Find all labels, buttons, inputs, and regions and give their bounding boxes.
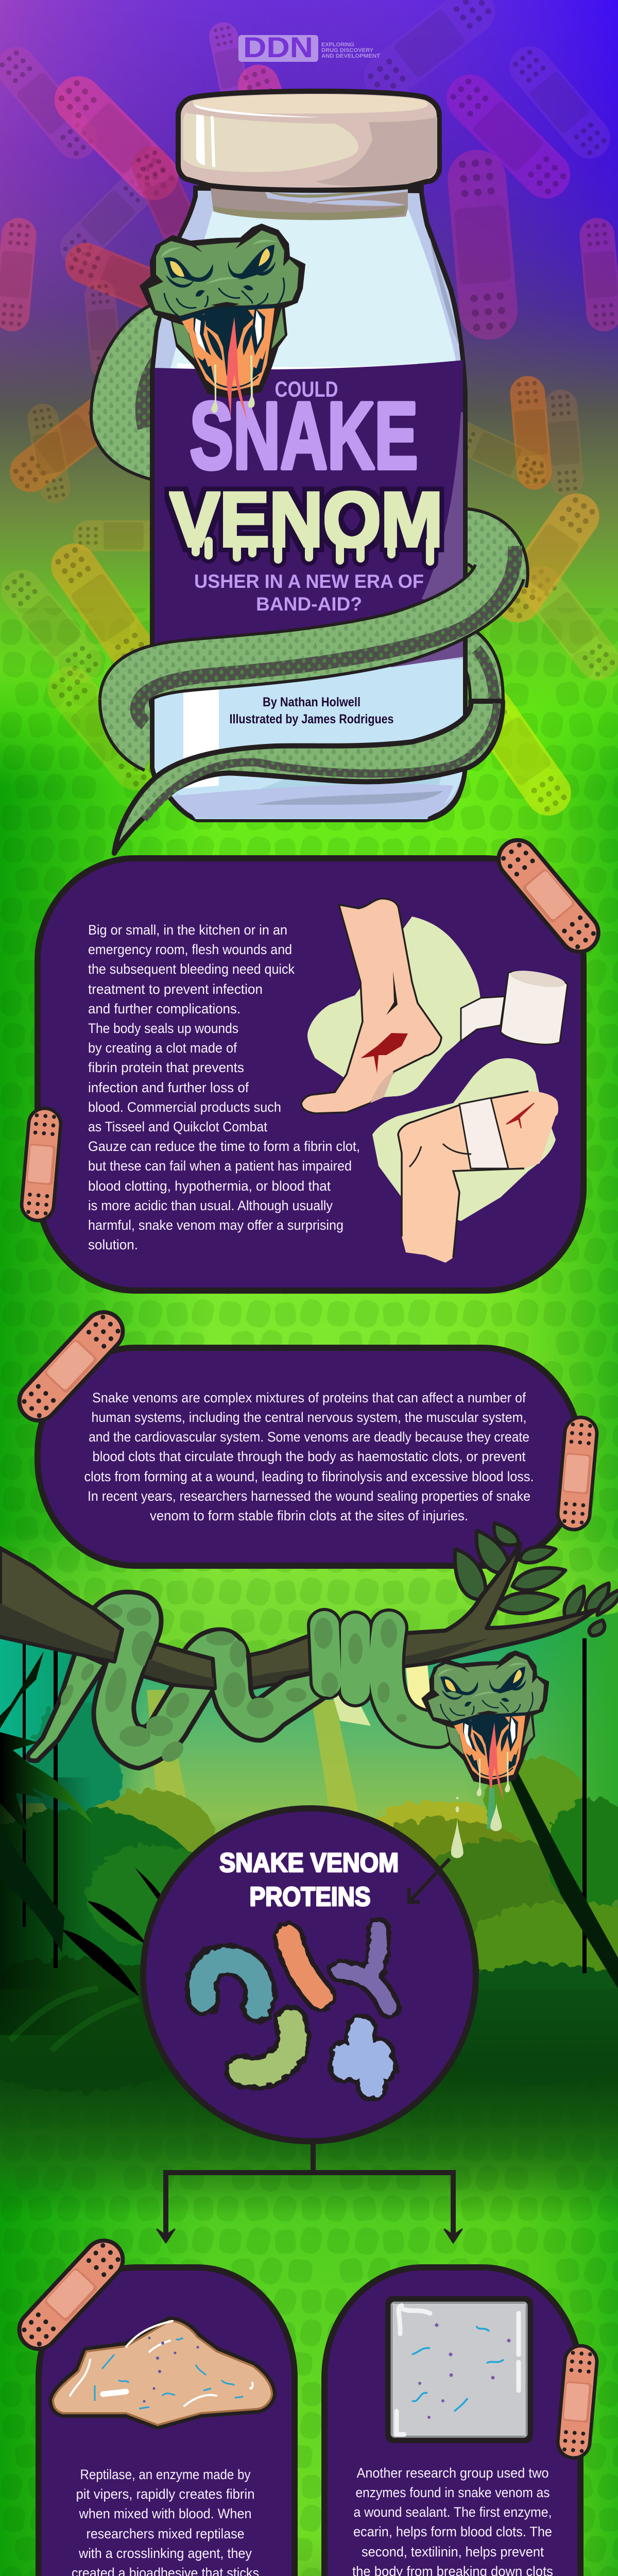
- text: reptilase paragraph: [67, 2467, 263, 2576]
- byline: Illustrated by James Rodrigues: [230, 712, 393, 726]
- icon: bandage right of venom panel: [557, 1416, 598, 1531]
- arrow: proteins to research branches: [157, 2144, 462, 2243]
- text: ecarin paragraph: ecarin, helps form blood clots. The: [353, 2524, 552, 2539]
- venom drops: [451, 1788, 502, 1858]
- snake hanging from branch: [28, 1592, 438, 1768]
- logo: DDN: EXPLORING: [321, 42, 354, 48]
- text: intro paragraph: [88, 922, 360, 1252]
- text: intro paragraph: infection and further loss of: [88, 1080, 249, 1095]
- text: reptilase paragraph: with a crosslinking agent, they: [78, 2546, 252, 2561]
- text: ecarin paragraph: Another research group used two: [356, 2465, 549, 2481]
- panel: ecarin and textilinin: [324, 2267, 580, 2576]
- label subheading: BAND-AID?: [256, 594, 362, 615]
- snake main coil: [94, 1592, 330, 1768]
- logo: DDN: DDN: [243, 31, 313, 63]
- icon: bandage top left of reptilase panel: [11, 2233, 131, 2357]
- text: intro paragraph: is more acidic than usual. Although usually: [88, 1198, 333, 1213]
- bottle cap: [178, 91, 439, 190]
- text: intro paragraph: harmful, snake venom may offer a surprising: [88, 1217, 344, 1233]
- tree branch right side with leaves: [249, 1523, 618, 1688]
- tree branch left side: [0, 1548, 215, 1688]
- snake coils in front of bottle: [114, 546, 515, 853]
- heading: snake venom proteins: PROTEINS: [249, 1882, 371, 1912]
- illustration: hydrogel square: [389, 2300, 529, 2439]
- snake hanging loops: [324, 1625, 438, 1730]
- panel: snake venoms explained: [38, 1348, 580, 1566]
- heading: snake venom proteins: SNAKE VENOM: [219, 1848, 399, 1878]
- snake head on bottle: [140, 224, 305, 421]
- text: intro paragraph: but these can fail when a patient has impaired: [88, 1158, 352, 1174]
- panel: reptilase: [39, 2267, 295, 2576]
- text: snake venoms paragraph: blood clots that circulate through the body as haemostatic clots, or prevent: [93, 1449, 526, 1464]
- icon: bandage left of intro panel: [21, 1107, 62, 1222]
- icon: bandage left of venom panel: [11, 1304, 131, 1428]
- text: intro paragraph: as Tisseel and Quikclot Combat: [88, 1119, 267, 1134]
- text: reptilase paragraph: Reptilase, an enzyme made by: [80, 2467, 251, 2482]
- illustration: bandaged knee: [372, 1058, 558, 1263]
- snake coils behind bottle: [118, 325, 501, 747]
- logo: DDN: DRUG DISCOVERY: [321, 47, 374, 54]
- text: ecarin paragraph: a wound sealant. The first enzyme,: [353, 2504, 552, 2520]
- text: snake venoms paragraph: and the cardiovascular system. Some venoms are deadly because they create: [89, 1429, 529, 1445]
- text: intro paragraph: and further complications.: [88, 1001, 241, 1016]
- text: ecarin paragraph: [351, 2465, 554, 2576]
- byline: By Nathan Holwell: [263, 695, 360, 709]
- text: intro paragraph: Big or small, in the kitchen or in an: [88, 922, 287, 938]
- text: snake venoms paragraph: venom to form stable fibrin clots at the sites of injuries.: [150, 1508, 468, 1523]
- bottle label: [154, 360, 463, 675]
- text: intro paragraph: blood. Commercial products such: [88, 1099, 281, 1115]
- jungle scene: [0, 1577, 618, 2215]
- text: snake venoms paragraph: In recent years, researchers harnessed the wound sealing properties of snake: [88, 1488, 530, 1504]
- snake patches: [58, 1604, 306, 1766]
- text: intro paragraph: The body seals up wounds: [88, 1021, 238, 1036]
- logo: DDN: [238, 31, 380, 63]
- text: intro paragraph: blood clotting, hypothermia, or blood that: [88, 1178, 331, 1194]
- text: intro paragraph: Gauze can reduce the time to form a fibrin clot,: [88, 1139, 360, 1154]
- snake tail: [28, 1651, 106, 1761]
- text: ecarin paragraph: enzymes found in snake venom as: [355, 2485, 550, 2500]
- label subheading: USHER IN A NEW ERA OF: [194, 571, 424, 592]
- illustration: bandage roll: [461, 968, 568, 1044]
- snake head on branch: [422, 1651, 548, 1802]
- text: snake venoms paragraph: human systems, including the central nervous system, the muscular system,: [92, 1410, 526, 1425]
- arrow: drop to proteins: [409, 1859, 450, 1902]
- text: intro paragraph: solution.: [88, 1237, 138, 1252]
- illustration: injured foot: [301, 899, 481, 1113]
- text: snake venoms paragraph: Snake venoms are complex mixtures of proteins that can affect a number of: [92, 1390, 526, 1405]
- text: reptilase paragraph: researchers mixed reptilase: [87, 2526, 244, 2541]
- panel: snake venom proteins circle: [143, 1808, 476, 2141]
- heading: snake venom proteins: [219, 1848, 399, 1912]
- icon: bandage top right of intro panel: [491, 833, 606, 959]
- panel: intro: [38, 858, 583, 1291]
- label heading: Venom dripping text: VENOM: [170, 476, 443, 563]
- label heading: Could: COULD: [275, 377, 338, 402]
- text: snake venoms paragraph: clots from forming at a wound, leading to fibrinolysis and excessive blood loss.: [84, 1469, 534, 1484]
- text: reptilase paragraph: pit vipers, rapidly creates fibrin: [76, 2486, 254, 2502]
- label heading: Snake: SNAKE: [190, 382, 418, 488]
- background faded bandages: [0, 0, 618, 824]
- text: intro paragraph: fibrin protein that prevents: [88, 1060, 244, 1075]
- text: intro paragraph: the subsequent bleeding need quick: [88, 961, 295, 977]
- logo: DDN: AND DEVELOPMENT: [321, 53, 380, 59]
- proteins illustration: [202, 1929, 389, 2086]
- text: intro paragraph: treatment to prevent infection: [88, 981, 263, 997]
- bottle: [150, 185, 468, 822]
- text: ecarin paragraph: second, textilinin, helps prevent: [362, 2544, 544, 2560]
- text: reptilase paragraph: when mixed with blood. When: [79, 2506, 251, 2521]
- illustration: bioadhesive gel: [53, 2321, 272, 2425]
- text: snake venoms paragraph: [84, 1390, 534, 1523]
- snake loop patches: [314, 1618, 407, 1722]
- label subheading: [194, 571, 424, 615]
- byline: [230, 695, 393, 726]
- text: intro paragraph: by creating a clot made of: [88, 1040, 237, 1056]
- text: intro paragraph: emergency room, flesh wounds and: [88, 942, 292, 957]
- icon: bandage right of ecarin panel: [557, 2345, 598, 2459]
